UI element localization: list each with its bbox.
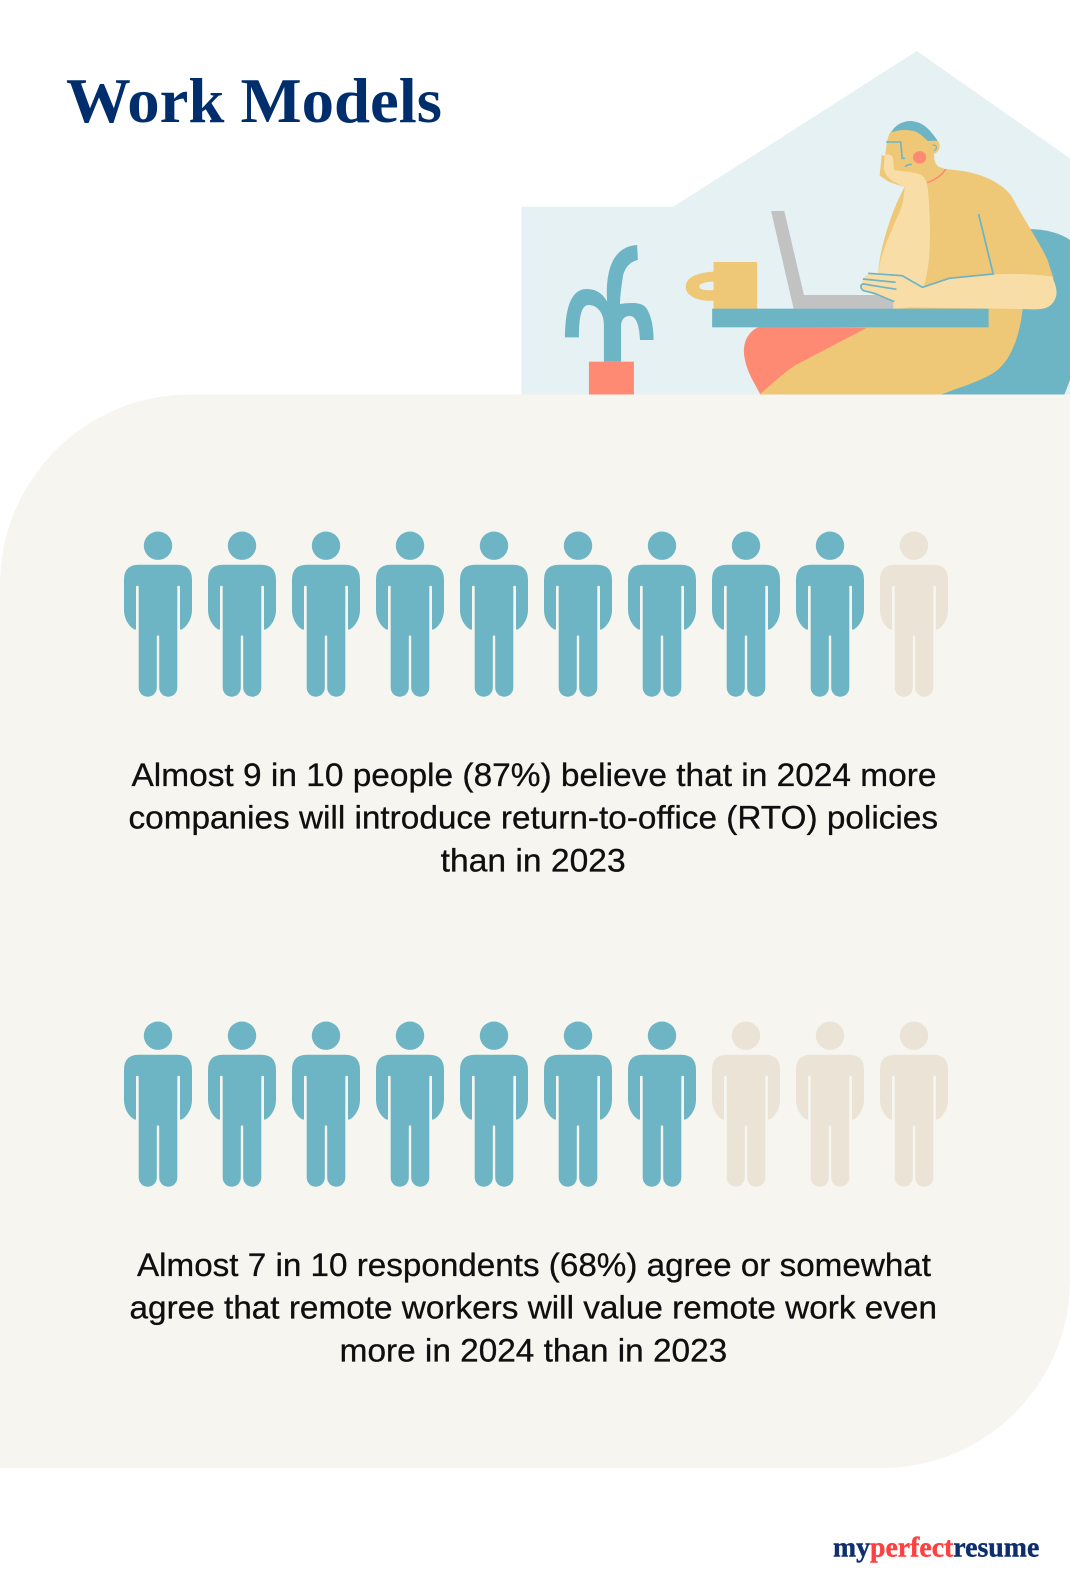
person 4 <box>376 532 444 697</box>
person 5 <box>460 532 528 697</box>
mug <box>686 262 757 310</box>
text block: 68% statistic: more in 2024 than in 2023 <box>340 1333 727 1369</box>
person 1 <box>124 532 192 697</box>
house background <box>521 51 1070 397</box>
person 9 <box>796 532 864 697</box>
panel: statistics background <box>0 394 1070 1468</box>
plant <box>565 245 654 397</box>
person 8 <box>712 532 780 697</box>
text block: 87% statistic: companies will introduce return-to-office (RTO) policies <box>128 800 938 836</box>
raised arm and hand <box>878 154 930 288</box>
desk <box>712 309 989 327</box>
necklace <box>927 169 946 183</box>
forearm and hand <box>861 273 1057 309</box>
title: Work Models <box>66 66 442 136</box>
person 1 <box>124 1021 192 1187</box>
person 3 <box>292 532 360 697</box>
face lines <box>886 142 936 167</box>
person 3 <box>292 1021 360 1187</box>
text block: 68% statistic <box>130 1247 937 1369</box>
person 4 <box>376 1021 444 1187</box>
person 8 muted <box>712 1021 780 1187</box>
seat <box>744 327 871 395</box>
torso <box>878 169 1054 310</box>
chart: 9 in 10 pictogram row <box>124 532 948 697</box>
chair <box>921 229 1070 397</box>
cheek <box>913 151 926 163</box>
logo: myperfectresume: perfect <box>870 1533 954 1564</box>
hair <box>891 121 937 141</box>
legs <box>759 307 1023 397</box>
text block: 87% statistic <box>128 757 938 879</box>
illustration: person working at laptop in house <box>521 51 1070 397</box>
text block: 87% statistic: than in 2023 <box>441 843 626 879</box>
text block: 87% statistic: Almost 9 in 10 people (87%) believe that in 2024 more <box>132 757 936 793</box>
person 5 <box>460 1021 528 1187</box>
logo: myperfectresume <box>833 1533 1039 1564</box>
person 2 <box>208 1021 276 1187</box>
person 9 muted <box>796 1021 864 1187</box>
person 10 muted <box>880 532 948 697</box>
person 10 muted <box>880 1021 948 1187</box>
laptop <box>771 211 896 310</box>
person 7 <box>628 1021 696 1187</box>
person 6 <box>544 532 612 697</box>
text block: 68% statistic: Almost 7 in 10 respondents (68%) agree or somewhat <box>137 1247 931 1283</box>
person 7 <box>628 532 696 697</box>
head <box>885 125 947 187</box>
person 6 <box>544 1021 612 1187</box>
text block: 68% statistic: agree that remote workers will value remote work even <box>130 1290 937 1326</box>
logo: myperfectresume: my <box>833 1533 870 1564</box>
chart: 7 in 10 pictogram row <box>124 1021 948 1187</box>
person 2 <box>208 532 276 697</box>
thumb shade <box>880 155 903 187</box>
arm and finger lines <box>861 214 993 302</box>
logo: myperfectresume: resume <box>953 1533 1039 1564</box>
